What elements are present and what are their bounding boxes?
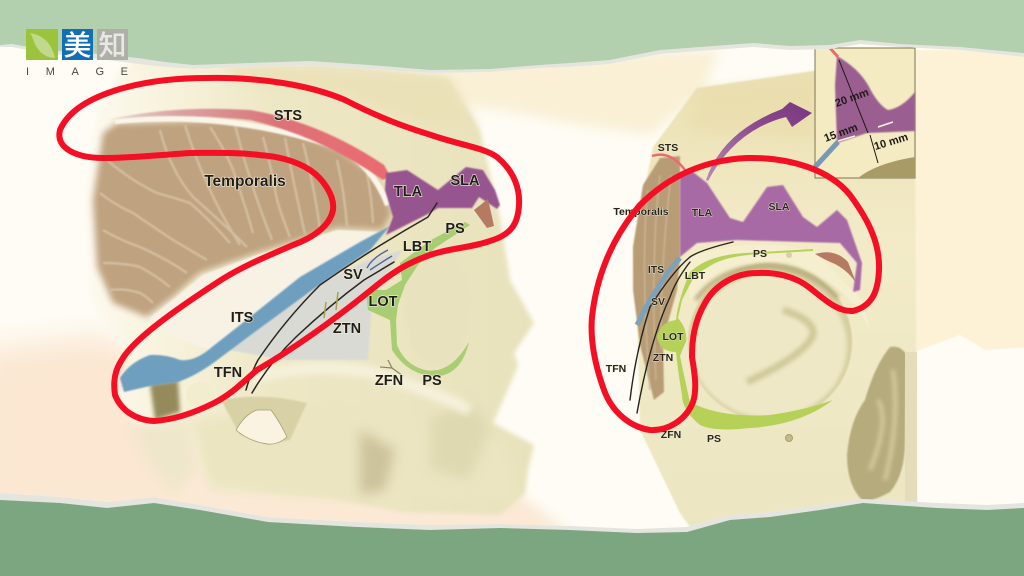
inset red septum [830,48,838,57]
frontal green septum [657,249,833,429]
inset eye socket [858,157,915,178]
logo: gray square: 知 [98,24,127,64]
orbicularis small muscle [474,199,494,228]
temporal and supraorbital ligament adhesions [385,167,500,235]
frontal nerve branches [630,242,733,413]
temporal branches of facial nerve [246,203,437,393]
frontal temporalis muscle [633,156,680,400]
label: PS lower: PS [422,373,442,389]
zygomatic highlight [250,368,470,410]
inset blue septum [815,142,838,167]
label: ITS: ITS [231,310,254,326]
label: ZTN: ZTN [653,352,673,364]
logo: blue square: 美 [63,24,92,64]
bottom green background [0,490,1024,576]
label: PS upper: PS [753,248,767,260]
label: LBT: LBT [685,270,706,282]
zygomaticotemporal nerves [324,292,338,318]
label: LOT: LOT [662,331,684,343]
upper cranium shading [230,66,478,130]
forehead upper shading [700,81,808,133]
label: ITS: ITS [648,264,664,276]
lateral skull bone [85,64,534,515]
label: TLA: TLA [692,207,713,219]
label: SV: SV [651,296,665,308]
label: Temporalis: Temporalis [613,206,669,218]
illustration: frontal skull [630,48,917,527]
temporalis tendon fan [150,230,385,350]
logo: leaf square [26,29,58,60]
frontal adhesion zone [680,172,862,292]
infraorbital dot [786,434,792,442]
temporalis muscle [93,119,392,317]
superior temporal septum [108,109,390,180]
label: PS lower: PS [707,433,721,445]
muscle white rim [115,119,388,205]
paper tint: peach bottom [214,490,566,526]
orbit interior [691,274,847,418]
labels: lateral view [204,108,480,389]
label: SLA: SLA [450,173,480,189]
supraorbital bone highlight [688,245,870,330]
label: 10 mm: 10 mm [873,131,910,153]
orbit cavity [402,250,470,367]
orbit fissure shadows [747,310,813,382]
label: SLA: SLA [768,201,790,213]
infratemporal mesh [229,250,402,360]
orbit [688,263,852,421]
nasal turbinate light [870,370,895,480]
labels: frontal view [606,142,790,445]
mandible bone fade [194,416,258,493]
label: TFN: TFN [214,365,242,381]
mastoid tip [138,422,191,486]
inset arrows [839,60,878,163]
green periorbital septum [366,222,470,376]
paper tint: peach lower left [0,327,206,502]
label: SV: SV [343,267,363,283]
lower shadow [360,430,395,495]
top green background [0,0,1024,80]
label: TFN: TFN [606,363,626,375]
label: LOT: LOT [368,294,398,310]
label: STS: STS [658,142,678,154]
mandibular notch [236,410,287,444]
supraorbital notch [786,252,792,258]
frontal skull bone [633,56,917,527]
paper tint: top cream [130,50,720,135]
supraorbital muscle [815,252,857,285]
temporalis fibres [644,175,671,390]
paper tint: right cream [915,50,1024,352]
logo [26,24,128,78]
inset panel [815,48,915,178]
label: 15 mm: 15 mm [823,122,860,145]
mastoid dark [150,380,180,420]
frontal superior septum [652,155,685,170]
label: LBT: LBT [403,239,431,255]
red outline: frontal danger zone [592,158,879,430]
nasal bone strip [905,352,917,502]
orbit rim highlight [696,266,838,300]
condyle [186,382,214,408]
label: ZFN: ZFN [661,429,681,441]
illustration: lateral skull [85,64,534,515]
label: STS: STS [274,108,302,124]
inset rule marks [838,122,893,141]
notch surround shading [221,397,307,445]
zygomaticofacial nerve [380,360,403,376]
label: Temporalis: Temporalis [204,173,286,190]
red outline: lateral danger zone [59,78,519,421]
label: ZTN: ZTN [333,321,361,337]
curved purple arrow [706,102,812,181]
logo: IMAGE wordmark: IMAGE [26,66,128,78]
nasal cavity [847,347,906,501]
sentinel vein [367,250,392,270]
inset purple region [835,56,915,143]
cheek shadow [430,412,486,477]
frontal inferior septum [637,258,680,325]
label: TLA: TLA [394,184,423,200]
label: 20 mm: 20 mm [834,87,871,110]
label: PS upper: PS [445,221,465,237]
inferior temporal septum [120,226,390,392]
label: ZFN: ZFN [375,373,403,389]
